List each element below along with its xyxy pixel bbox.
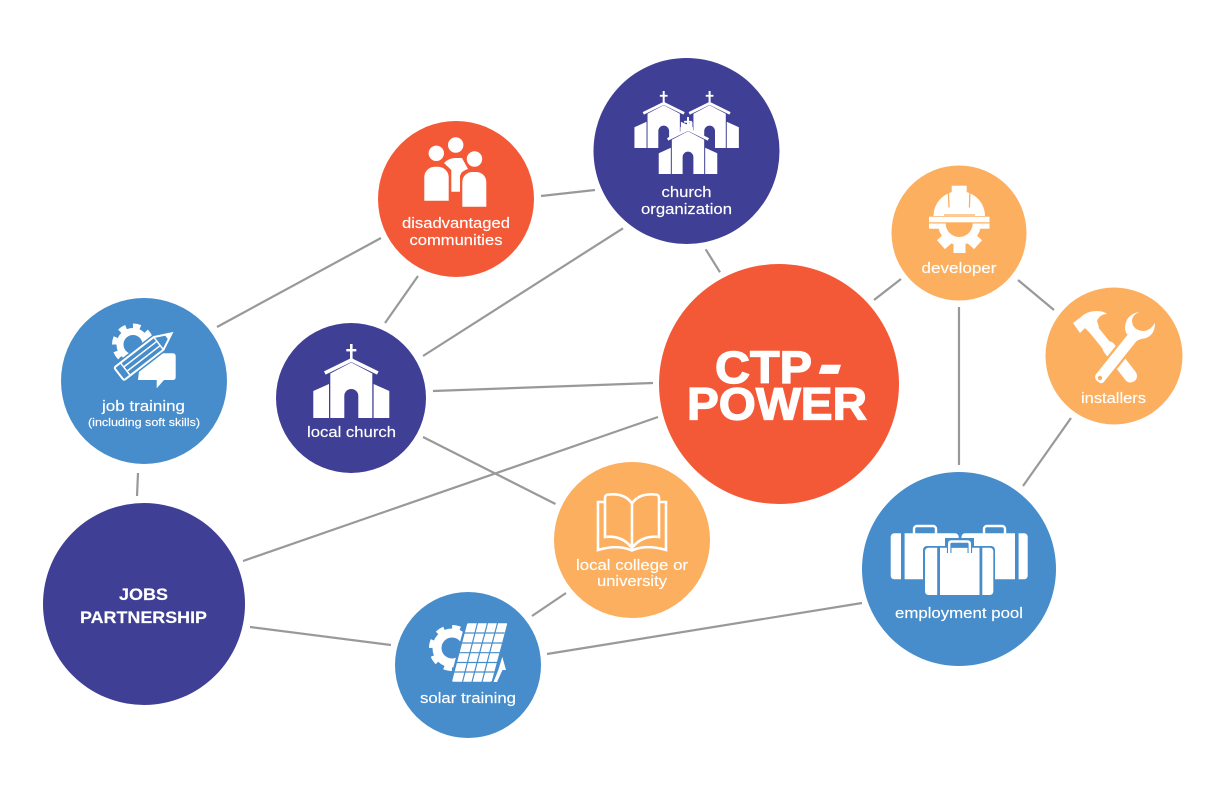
icon: three suitcases xyxy=(891,526,1028,597)
label: job training: (including soft skills) xyxy=(88,417,200,429)
label: solar training: solar training xyxy=(420,690,516,707)
node: local church xyxy=(276,323,426,473)
node: job training xyxy=(61,298,227,464)
node: developer xyxy=(892,166,1026,300)
label: developer: developer xyxy=(922,260,996,277)
node: solar training xyxy=(395,592,541,738)
label: disadvantaged communities: disadvantaged xyxy=(402,215,510,232)
label: JOBS PARTNERSHIP xyxy=(80,586,207,627)
connector lines xyxy=(137,190,1071,654)
icon: church xyxy=(313,344,389,418)
node: church organization xyxy=(594,58,780,244)
label: job training: job training xyxy=(101,398,185,415)
icon: hammer and wrench xyxy=(1073,311,1155,384)
label: installers: installers xyxy=(1081,390,1146,407)
label: church organization: organization xyxy=(641,201,732,218)
icon: family xyxy=(424,137,486,207)
label: JOBS PARTNERSHIP: PARTNERSHIP xyxy=(80,609,207,627)
label: local college or university xyxy=(576,557,688,590)
icon: hard hat and gear xyxy=(929,186,990,253)
node: Jobs Partnership xyxy=(43,503,245,705)
label: job training xyxy=(88,398,200,429)
icon: gear and solar panel xyxy=(432,622,510,684)
node: installers xyxy=(1046,288,1182,424)
label: local college or university: university xyxy=(597,573,668,590)
label: church organization xyxy=(641,184,732,218)
label: disadvantaged communities xyxy=(402,215,510,249)
label: church organization: church xyxy=(662,184,712,201)
label: employment pool: employment pool xyxy=(895,605,1023,622)
node: CTP-POWER xyxy=(659,264,899,504)
title: CTP-POWER: POWER xyxy=(687,378,867,430)
icon: three churches xyxy=(634,91,739,176)
title: CTP-POWER xyxy=(687,320,867,430)
node: local college or university xyxy=(554,462,710,618)
icon: open book xyxy=(598,494,666,550)
node: employment pool xyxy=(862,472,1056,666)
title: CTP-POWER: - xyxy=(805,320,859,406)
label: local college or university: local college or xyxy=(576,557,688,574)
node: disadvantaged communities xyxy=(378,121,534,277)
label: JOBS PARTNERSHIP: JOBS xyxy=(119,586,168,604)
icon: gear, pencil and speech bubble xyxy=(111,322,182,388)
label: disadvantaged communities: communities xyxy=(410,232,502,249)
label: local church: local church xyxy=(307,424,396,441)
title: CTP-POWER: CTP xyxy=(715,342,812,393)
